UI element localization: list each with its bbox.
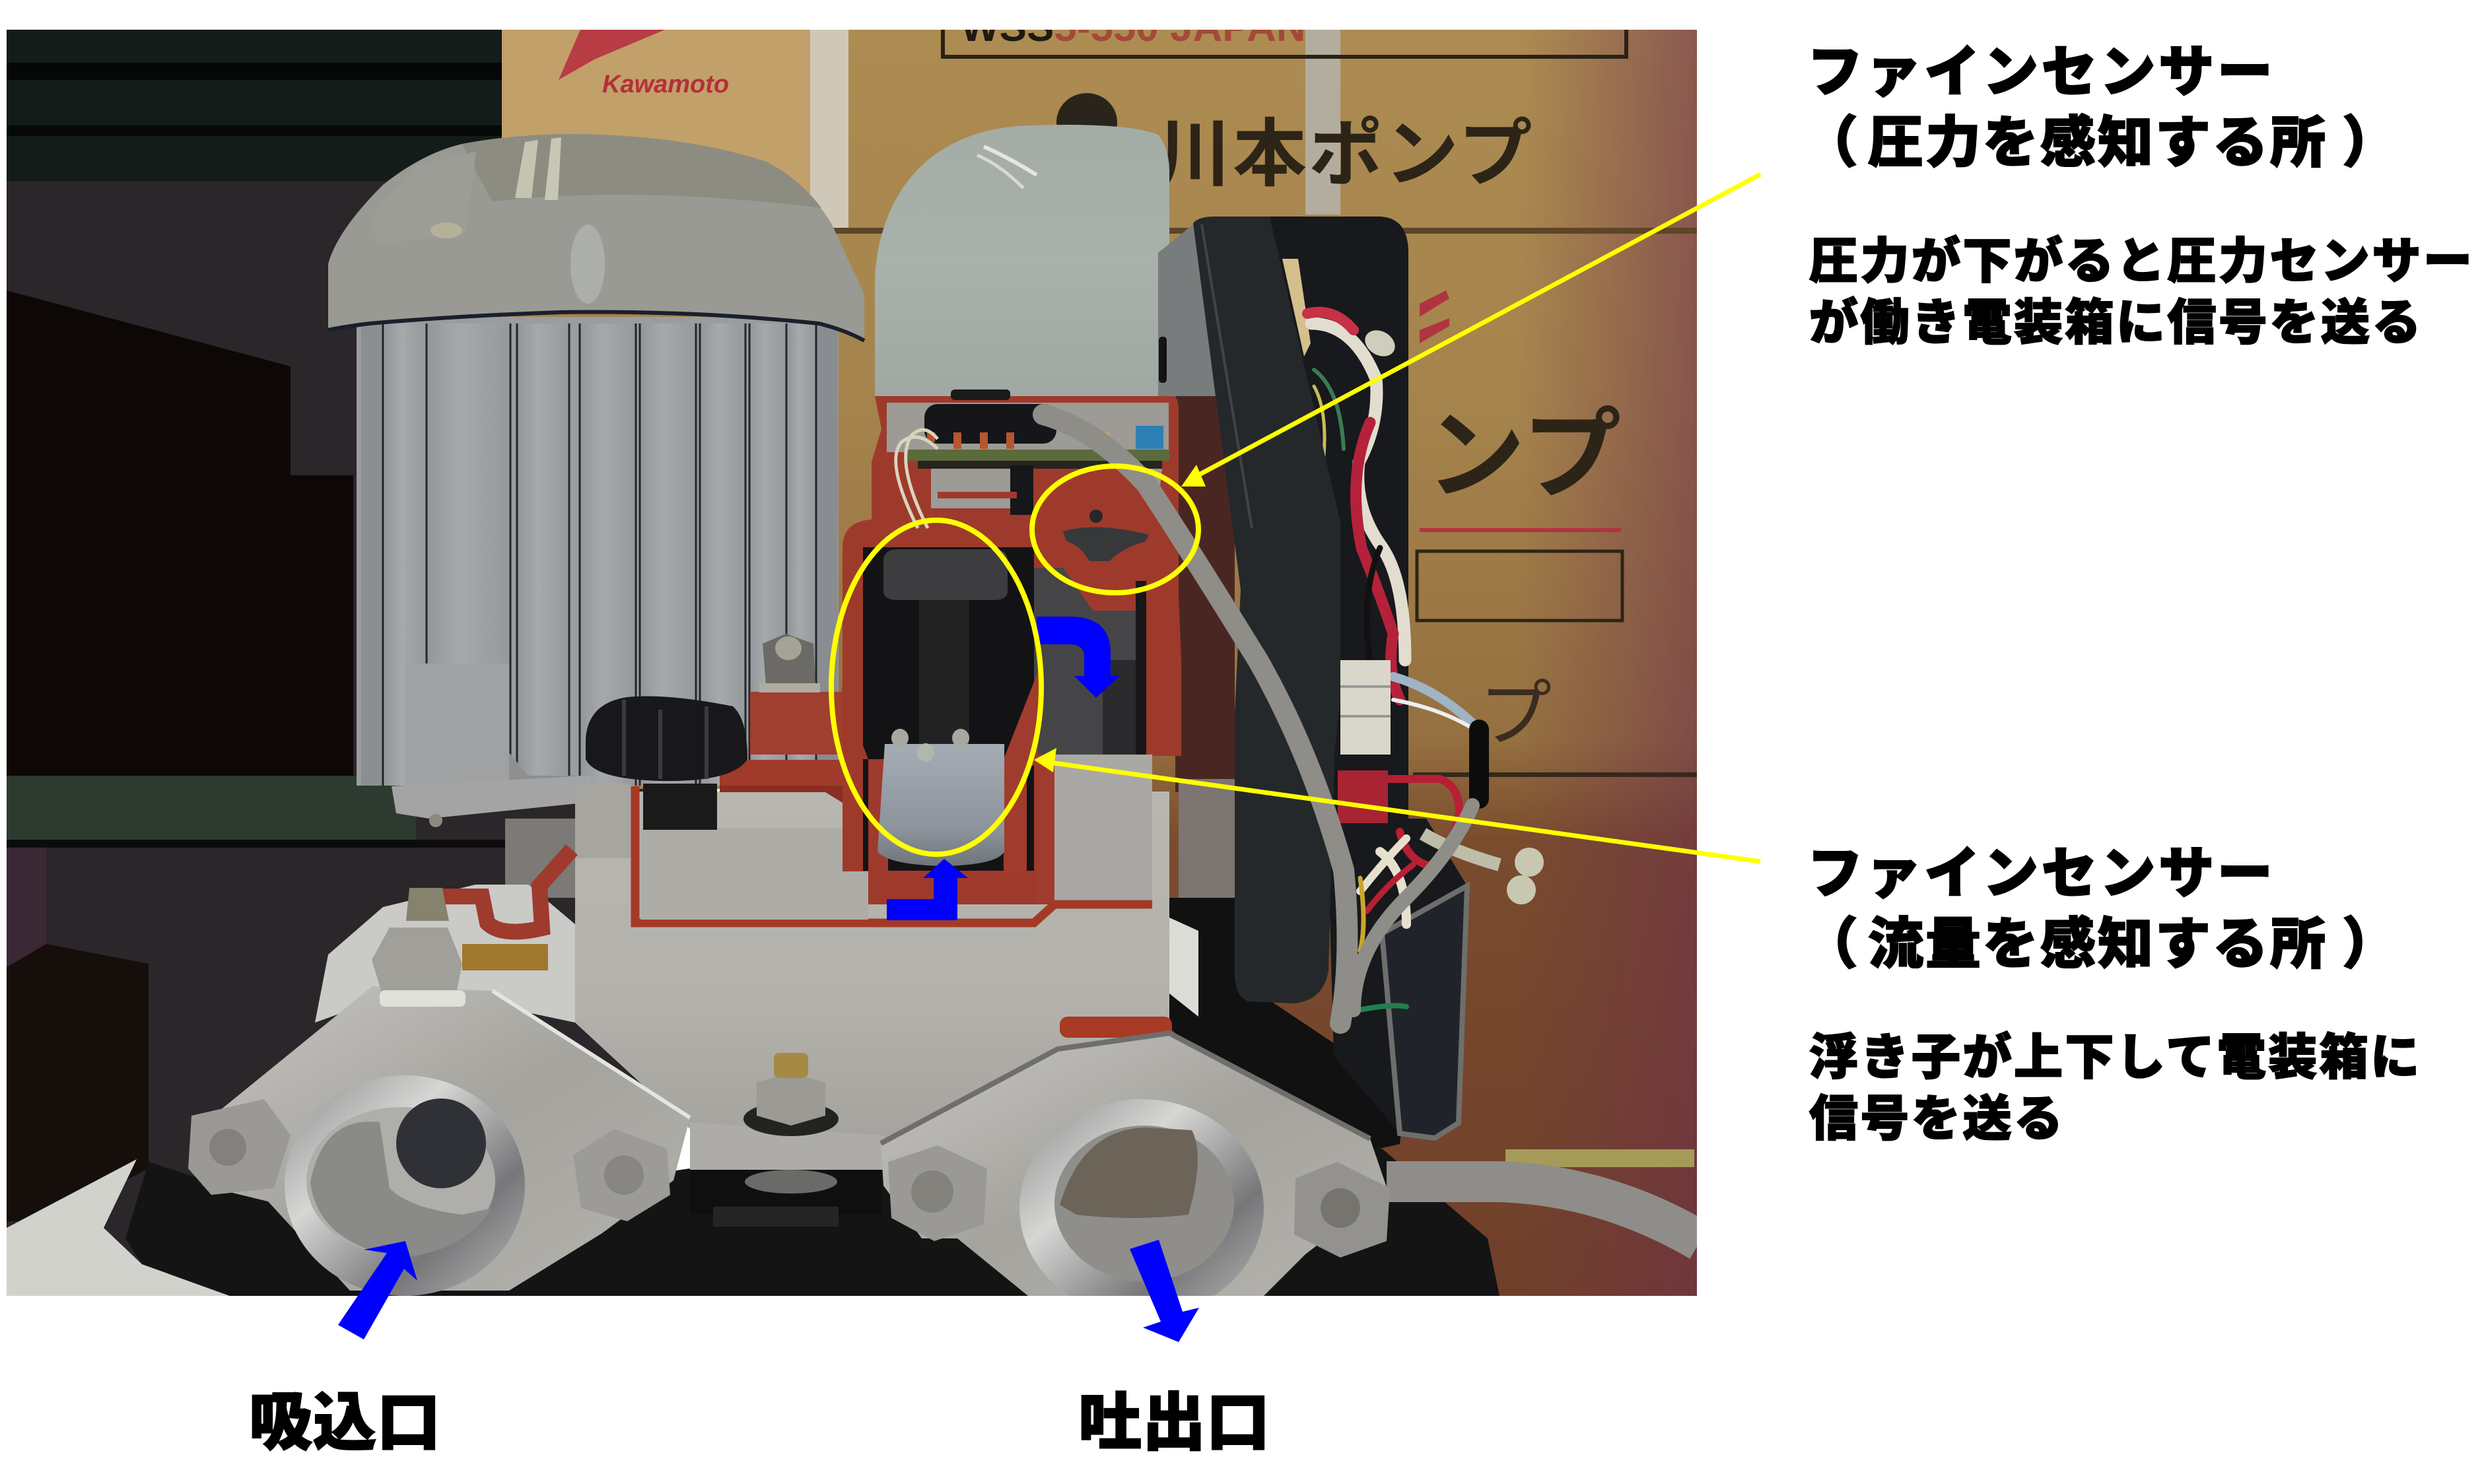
strap plate and center nut xyxy=(690,1053,885,1194)
description: pressure sensing: が働き電装箱に信号を送る xyxy=(1809,295,2423,350)
flow chamber interior xyxy=(842,547,1146,904)
flow arrow: into inlet port xyxy=(338,1241,417,1339)
flow arrow: curved down in right chamber xyxy=(1037,617,1120,698)
inlet flange bolts xyxy=(188,1099,670,1221)
red cutaway lower chamber xyxy=(635,692,1152,923)
highlight ellipse: flow sensing area xyxy=(831,520,1041,854)
background: dark shelves and wall xyxy=(7,30,667,1296)
black pump base xyxy=(125,1149,1500,1296)
pressure tank cover dome xyxy=(875,125,1169,396)
photo: cutaway pump xyxy=(7,5,1700,1317)
electrical box back compartment xyxy=(1268,217,1467,1138)
leader arrow to pressure sensing area xyxy=(1181,174,1760,487)
red cutaway left side fitting and foam xyxy=(7,850,575,1296)
inlet flange with threaded port xyxy=(191,888,690,1296)
heading: pressure sensing location xyxy=(1803,41,2399,174)
heading: flow sensing location: （流量を感知する所 ） xyxy=(1803,913,2399,975)
flow sensor float xyxy=(878,729,1004,866)
description: pressure sensing: 圧力が下がると圧力センサー xyxy=(1809,234,2475,288)
motor end cap xyxy=(328,134,864,341)
pressure sensor diaphragm xyxy=(1063,510,1149,561)
gray signal cables xyxy=(1043,415,1472,1023)
heading: flow sensing location xyxy=(1803,842,2399,975)
background: cardboard boxes with printed logos: プ xyxy=(1479,674,1552,755)
background: cardboard boxes with printed logos: Kawamoto xyxy=(602,71,729,98)
description: flow sensing: 信号を送る xyxy=(1809,1091,2065,1146)
electrical box front cover xyxy=(1193,217,1340,1003)
outlet flange bolts xyxy=(888,1145,1390,1258)
leader arrow to flow sensing area xyxy=(1034,748,1760,861)
heading: flow sensing location: ファインセンサー xyxy=(1807,842,2276,904)
motor base foot xyxy=(392,660,591,898)
highlight ellipse: pressure sensing area xyxy=(1032,466,1198,593)
connectors and zip tie xyxy=(1338,325,1544,904)
red cutaway sensor housing xyxy=(843,389,1181,904)
sensor board lead wires xyxy=(896,430,938,528)
heading: pressure sensing location: ファインセンサー xyxy=(1807,41,2276,103)
description: flow sensing xyxy=(1809,1030,2422,1146)
description: pressure sensing xyxy=(1809,234,2475,350)
heading: pressure sensing location: （圧力を感知する所 ） xyxy=(1803,112,2399,174)
background: cardboard boxes with printed logos: 川本ポンプ xyxy=(1157,113,1534,195)
gray power cable and strap xyxy=(1387,1149,1700,1241)
background: cardboard boxes with printed logos xyxy=(502,5,1697,1296)
background: cardboard boxes with printed logos: ンプ xyxy=(1426,400,1622,511)
silver pump body xyxy=(575,755,1169,1143)
description: flow sensing: 浮き子が上下して電装箱に xyxy=(1809,1030,2422,1085)
flow arrow: up into float chamber xyxy=(887,859,968,920)
electrical box side panel xyxy=(1158,224,1406,1162)
black drain knob xyxy=(586,696,747,830)
background: cardboard boxes with printed logos: WSS5-550 JAPAN xyxy=(961,5,1306,50)
outlet flange with threaded port xyxy=(881,1017,1388,1317)
electrical box wiring xyxy=(1307,312,1479,1010)
label: inlet: 吸込口 xyxy=(249,1388,441,1458)
flow arrow: out of outlet port xyxy=(1130,1240,1199,1342)
label: outlet: 吐出口 xyxy=(1078,1388,1270,1458)
hex bolt on motor flange xyxy=(759,634,820,692)
motor fins xyxy=(357,317,839,786)
